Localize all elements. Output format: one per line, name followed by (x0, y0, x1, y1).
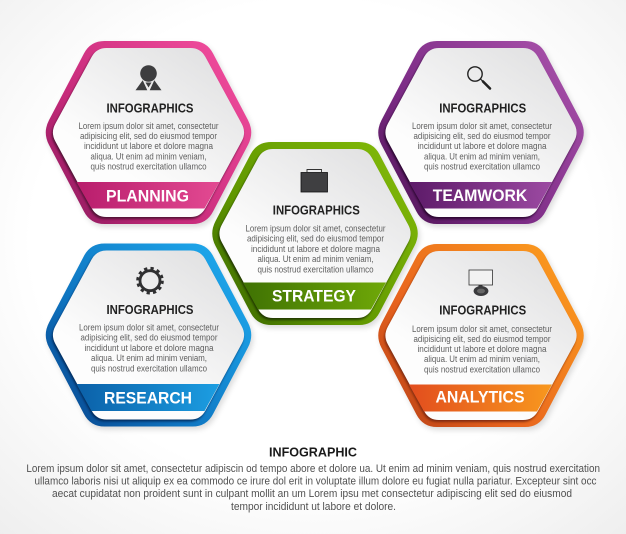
text block: strategy: incididunt ut labore et dolore magna (251, 244, 381, 255)
text block: strategy (246, 224, 386, 275)
text block: analytics (412, 324, 553, 375)
panel: planning (46, 41, 253, 227)
text block: research: quis nostrud exercitation ullamco (91, 364, 207, 375)
text block: strategy: aliqua. Ut enim ad minim veniam, (258, 254, 374, 265)
heading: infographics: INFOGRAPHICS (439, 304, 526, 318)
text block: planning (78, 121, 219, 172)
icon: gear (138, 268, 162, 293)
heading: infographics: INFOGRAPHICS (439, 101, 526, 115)
text block: strategy: Lorem ipsum dolor sit amet, consectetur (246, 224, 386, 235)
heading: infographics: INFOGRAPHICS (273, 204, 360, 218)
label band: planning (76, 182, 220, 208)
label band: research (76, 384, 220, 411)
label band: research: RESEARCH (104, 389, 192, 407)
title: infographic: INFOGRAPHIC (269, 446, 357, 460)
icon: monitor (469, 270, 492, 296)
text block: research: adipisicing elit, sed do eiusmod tempor (80, 333, 218, 344)
text block: footer paragraph (26, 463, 600, 513)
text block: planning: adipisicing elit, sed do eiusmod tempor (80, 131, 218, 142)
label band: analytics: ANALYTICS (436, 389, 524, 407)
text block: analytics: Lorem ipsum dolor sit amet, consectetur (412, 324, 553, 335)
text block: research: Lorem ipsum dolor sit amet, consectetur (79, 323, 220, 334)
label band: strategy: STRATEGY (272, 288, 356, 306)
text block: research (79, 323, 220, 375)
text block: analytics: aliqua. Ut enim ad minim veniam, (424, 354, 540, 365)
label band: teamwork: TEAMWORK (433, 187, 527, 205)
text block: strategy: adipisicing elit, sed do eiusmod tempor (247, 234, 385, 245)
text block: footer paragraph: aecat cupidatat non proident sunt in culpant mollit an um Lorem ipsu met consectetur adipiscing elit sed do eiusmod (52, 488, 572, 500)
text block: teamwork: adipisicing elit, sed do eiusmod tempor (414, 131, 551, 142)
label band: planning: PLANNING (106, 188, 189, 206)
icon: briefcase (301, 170, 328, 192)
text block: analytics: adipisicing elit, sed do eiusmod tempor (414, 334, 551, 345)
label band: teamwork (409, 182, 552, 208)
text block: analytics: incididunt ut labore et dolore magna (418, 344, 547, 355)
text block: strategy: quis nostrud exercitation ullamco (258, 264, 374, 275)
text block: planning: aliqua. Ut enim ad minim veniam, (90, 151, 206, 162)
panel: research (46, 244, 253, 430)
panel: teamwork (378, 41, 586, 227)
panel: strategy (212, 142, 420, 328)
text block: teamwork: incididunt ut labore et dolore magna (418, 141, 547, 152)
text block: research: incididunt ut labore et dolore magna (84, 343, 214, 354)
text block: research: aliqua. Ut enim ad minim veniam, (91, 353, 207, 364)
text block: teamwork (412, 121, 553, 172)
icon: magnifier (468, 67, 490, 88)
label band: analytics (409, 384, 552, 412)
label band: strategy (243, 282, 386, 310)
text block: footer paragraph: tempor incididunt ut labore et dolore. (231, 501, 396, 513)
text block: teamwork: quis nostrud exercitation ullamco (424, 162, 540, 172)
text block: teamwork: Lorem ipsum dolor sit amet, consectetur (412, 121, 553, 132)
text block: teamwork: aliqua. Ut enim ad minim veniam, (424, 151, 540, 162)
icon: person (136, 65, 162, 90)
text block: planning: Lorem ipsum dolor sit amet, consectetur (78, 121, 219, 132)
heading: infographics: INFOGRAPHICS (106, 101, 194, 115)
text block: analytics: quis nostrud exercitation ullamco (424, 364, 540, 375)
panel: analytics (378, 244, 586, 430)
text block: planning: incididunt ut labore et dolore magna (84, 141, 214, 152)
text block: planning: quis nostrud exercitation ullamco (90, 162, 206, 172)
heading: infographics: INFOGRAPHICS (106, 303, 194, 317)
